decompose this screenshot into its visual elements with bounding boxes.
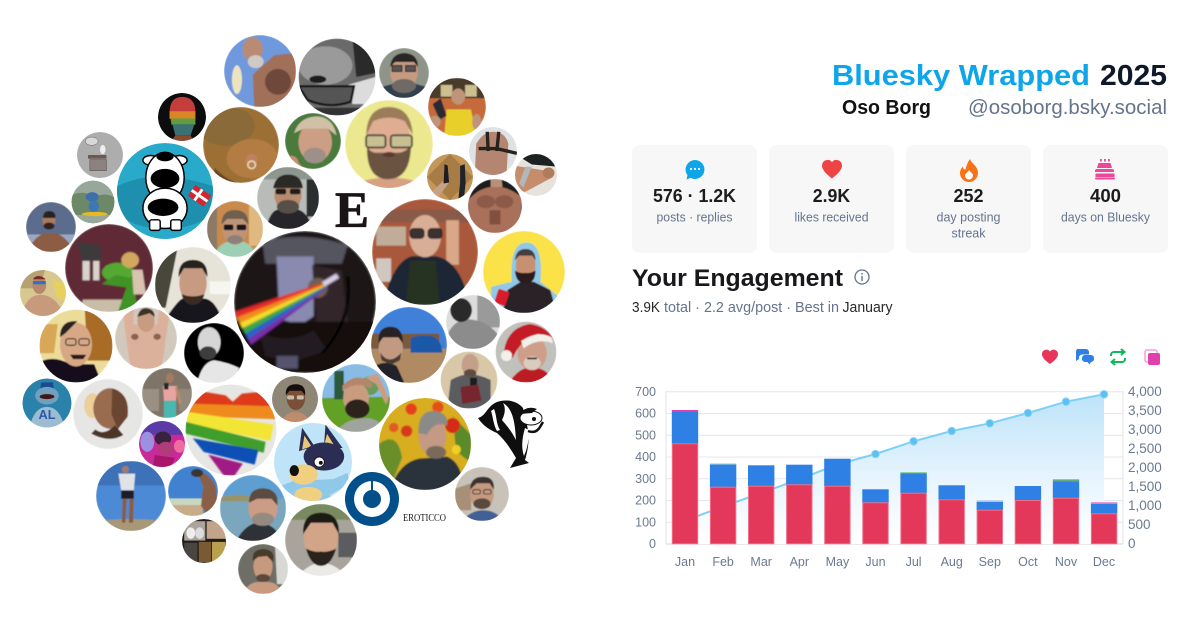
left axis labels: 700: [635, 385, 656, 399]
stat card: posting streak: day posting: [936, 210, 1000, 224]
avatar: man in sunglasses driving: [257, 167, 319, 229]
avatar: round blue logo with wordmark: EROTICCO: [403, 512, 446, 524]
avatar: vintage photo collage: [182, 519, 226, 563]
month labels: Jul: [906, 555, 922, 569]
icon: flame: [960, 159, 978, 182]
avatar: blue puppet AL: AL: [39, 407, 56, 422]
avatar: shirtless man with curly hair: [238, 544, 288, 594]
avatar: man in yellow shirt: [428, 78, 486, 136]
avatar: torso with harness: [469, 127, 517, 175]
right axis labels: 1,500: [1128, 479, 1162, 494]
avatar: hairy chest close-up: [197, 106, 279, 183]
stat card: likes: [769, 145, 894, 253]
month labels: Sep: [979, 555, 1001, 569]
bars: replies, reposts, quotes: [672, 410, 1117, 514]
avatar: man with glasses and moustache: [40, 310, 112, 382]
right axis labels: [1128, 384, 1162, 551]
icon: cake: [1095, 159, 1115, 180]
month labels: Oct: [1018, 555, 1038, 569]
avatar: blue puppet AL: [22, 378, 72, 428]
avatar: man with glasses, blue shirt: [455, 467, 509, 521]
plot grid: [666, 391, 1123, 544]
avatar: forearm: [515, 154, 557, 196]
avatar: man standing under blue sky: [96, 461, 166, 531]
month labels: Nov: [1055, 555, 1078, 569]
avatar: snoopy on doghouse sketch: [77, 132, 123, 178]
engagement summary line: January: [842, 300, 893, 316]
avatar: borg drone with rainbow beam: [234, 231, 376, 373]
title: Bluesky Wrapped: [832, 60, 1090, 92]
avatar: legs in mesh socks: [427, 154, 473, 200]
stat card: posts and replies: posts · replies: [656, 210, 733, 224]
month labels: Aug: [941, 555, 963, 569]
avatar: bearded man with glasses on yellow: [345, 100, 433, 188]
avatar: bluey cartoon dog: [274, 423, 352, 503]
chart: monthly engagement stacked bars with cumulative line: [635, 384, 1162, 569]
icon: replies legend: [1076, 348, 1094, 364]
month labels: [675, 555, 1115, 569]
avatar: man with blue sunglasses shirtless: [20, 270, 66, 316]
avatar: bearded man with arm behind head: [322, 364, 390, 432]
avatar: bearded man selfie on street: [285, 504, 357, 576]
stat card: posting streak: [906, 145, 1031, 253]
right axis labels: 0: [1128, 536, 1136, 551]
display name: Oso Borg: [842, 97, 931, 119]
right axis labels: 2,000: [1128, 460, 1162, 475]
avatar: mirror selfie in tank top: [142, 368, 192, 418]
avatar: man in santa hat: [496, 322, 556, 382]
avatar: round blue logo with wordmark: [345, 472, 446, 526]
avatar: muscular chest: [468, 179, 522, 233]
avatar: letter E logo: E: [335, 183, 369, 239]
left axis labels: 200: [635, 494, 656, 508]
right axis labels: 2,500: [1128, 441, 1162, 456]
avatar: man with glasses, dark skin: [272, 376, 318, 422]
icon: quotes legend: [1145, 350, 1160, 365]
avatar: man among tulips: [379, 398, 471, 490]
stat card: likes: 2.9K: [813, 185, 851, 206]
avatar: black and white eye close-up: [298, 38, 376, 116]
avatar: serious man in car: [155, 247, 231, 323]
avatar: smiling man by the water: [220, 475, 286, 541]
avatar: man by the beach: [168, 466, 218, 516]
month labels: Feb: [712, 555, 734, 569]
icon: heart: [822, 160, 842, 178]
bars: likes: [672, 444, 1117, 544]
avatar: black and white man from behind: [446, 295, 500, 349]
right axis labels: 3,500: [1128, 403, 1162, 418]
left axis labels: 400: [635, 450, 656, 464]
avatar: mirror selfie in grey shirt: [440, 352, 498, 408]
panel: avatar bubble cluster: [20, 35, 565, 594]
handle: @osoborg.bsky.social: [968, 96, 1167, 119]
avatar: man with dark sunglasses, teal shirt: [207, 201, 263, 257]
month labels: Jan: [675, 555, 695, 569]
right axis labels: 4,000: [1128, 384, 1162, 399]
engagement summary line: 3.9K: [632, 300, 660, 316]
avatar: letter E logo: [323, 181, 381, 239]
icon: reposts legend: [1111, 349, 1125, 365]
left axis labels: 100: [635, 515, 656, 529]
chart legend icons: [1042, 348, 1160, 365]
month labels: Jun: [865, 555, 886, 569]
avatar: bearded man with banana: [224, 35, 296, 107]
month labels: Dec: [1093, 555, 1115, 569]
avatar: black and white bearded man: [184, 323, 244, 383]
cumulative area: [685, 394, 1104, 544]
month labels: May: [826, 555, 850, 569]
avatar: rainbow painted face: [158, 93, 206, 141]
stat card: likes: likes received: [794, 210, 868, 224]
left axis labels: [635, 385, 656, 551]
avatar: man with cap: [285, 113, 341, 169]
left axis labels: 300: [635, 472, 656, 486]
stat card: posting streak: 252: [954, 185, 984, 206]
avatar: stitch figurine on surfboard: [72, 180, 114, 224]
avatar: shirtless man arms raised: [115, 307, 177, 369]
avatar: man in pink neon light: [139, 421, 185, 467]
avatar: man with blue car: [371, 307, 447, 383]
right axis labels: 500: [1128, 517, 1151, 532]
avatar: kermit and figures on maroon: [65, 224, 153, 312]
cumulative line: [685, 390, 1108, 521]
avatar: man with glasses on olive background: [379, 48, 429, 98]
month labels: Mar: [750, 555, 772, 569]
stat card: posts and replies: 576 · 1.2K: [653, 185, 737, 206]
icon: speech bubble: [686, 160, 704, 180]
stat card: posting streak: streak: [952, 226, 986, 240]
heading: Your Engagement: Your Engagement: [632, 265, 843, 292]
stat card: days on Bluesky: 400: [1090, 185, 1121, 206]
avatar: bearded man holding can on yellow: [483, 231, 565, 313]
left axis labels: 500: [635, 428, 656, 442]
avatar: pepe le pew skunk: [478, 400, 543, 468]
right axis labels: 1,000: [1128, 498, 1162, 513]
right axis labels: 3,000: [1128, 422, 1162, 437]
left axis labels: 600: [635, 406, 656, 420]
engagement summary line: total · 2.2 avg/post · Best in: [664, 300, 839, 316]
avatar: bald man with round glasses: [372, 199, 478, 305]
title: 2025: [1100, 60, 1167, 92]
stat card: days on Bluesky: [1043, 145, 1168, 253]
month labels: Apr: [790, 555, 809, 569]
engagement summary line: [632, 300, 893, 316]
stat card: days on Bluesky: days on Bluesky: [1061, 210, 1150, 224]
avatar: shirtless man under dusk sky: [26, 202, 76, 252]
left axis labels: 0: [649, 537, 656, 551]
stat card: posts and replies: [632, 145, 757, 253]
icon: likes legend: [1042, 350, 1058, 364]
avatar: rainbow painted heart: [186, 384, 276, 476]
avatar: sepia portrait sketch: [73, 379, 143, 449]
avatar: cartoon cow with Danish flag: [117, 143, 213, 239]
icon: info: [855, 270, 869, 284]
